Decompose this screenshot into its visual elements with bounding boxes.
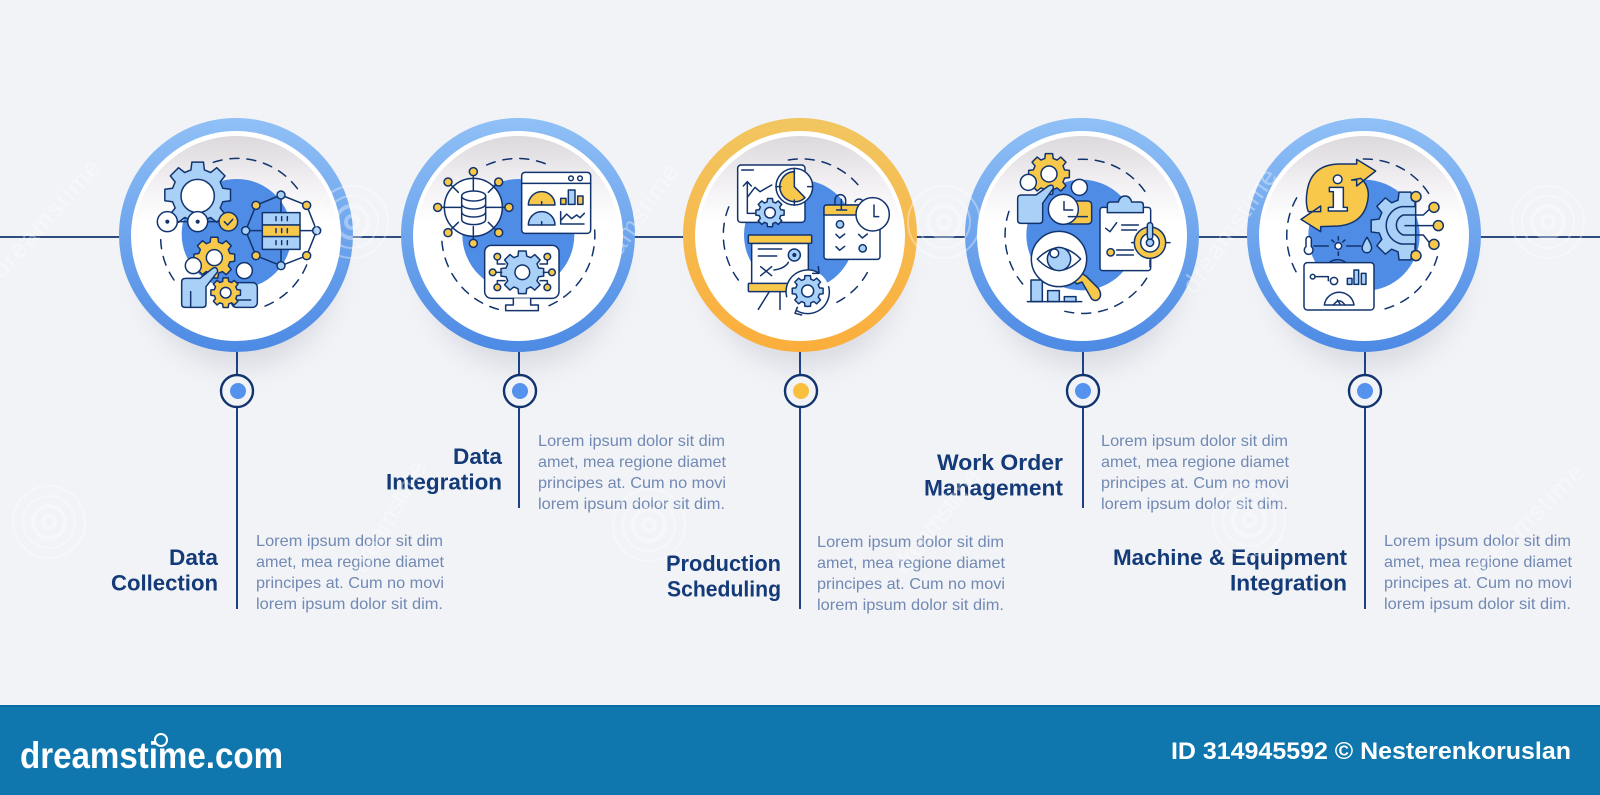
text block 5: principes at. Cum no movi bbox=[1384, 575, 1572, 592]
circle badge 5 bbox=[1247, 118, 1481, 368]
icon: data collection bbox=[157, 158, 321, 307]
text block 1: lorem ipsum dolor sit dim. bbox=[256, 596, 443, 613]
watermark overlay: dreamstime bbox=[577, 157, 685, 293]
circle badge 4 bbox=[965, 118, 1199, 368]
text block 5: Lorem ipsum dolor sit dim bbox=[1384, 533, 1571, 550]
footer banner bbox=[0, 705, 1600, 795]
text block 1: principes at. Cum no movi bbox=[256, 575, 444, 592]
text block 1: amet, mea regione diamet bbox=[256, 554, 445, 571]
heading: data integration: Data bbox=[453, 444, 503, 469]
text block 1: Lorem ipsum dolor sit dim bbox=[256, 533, 443, 550]
text block 3: principes at. Cum no movi bbox=[817, 576, 1005, 593]
panel: work order management bbox=[924, 118, 1290, 513]
icon: production scheduling bbox=[723, 159, 889, 315]
connector stem and node 5 bbox=[1349, 352, 1381, 609]
heading: data collection: Data bbox=[169, 545, 219, 570]
heading: work order management bbox=[924, 450, 1064, 500]
heading: data collection: Collection bbox=[111, 570, 218, 596]
watermark overlay: dreamstime bbox=[1175, 162, 1283, 298]
text block 2: Lorem ipsum dolor sit dim bbox=[538, 433, 725, 450]
text block 2: amet, mea regione diamet bbox=[538, 454, 727, 471]
heading: production scheduling bbox=[666, 551, 781, 602]
text block 1 bbox=[256, 533, 445, 613]
heading: data integration bbox=[386, 444, 503, 494]
icon: machine and equipment integration bbox=[1287, 159, 1443, 310]
watermark overlay: dreamstime bbox=[886, 462, 987, 579]
panel: data integration bbox=[386, 118, 727, 513]
panel: machine and equipment integration bbox=[1113, 118, 1573, 613]
horizontal connector line bbox=[0, 236, 1600, 238]
heading: production scheduling: Production bbox=[666, 551, 781, 576]
heading: machine and equipment integration: Integration bbox=[1230, 570, 1347, 596]
watermark overlay: dreamstime bbox=[1463, 457, 1590, 584]
circle badge 3 bbox=[683, 118, 917, 368]
watermark overlay bbox=[0, 152, 1590, 584]
text block 4: lorem ipsum dolor sit dim. bbox=[1101, 496, 1288, 513]
footer logo: dreamstime.com bbox=[20, 735, 283, 776]
heading: machine and equipment integration bbox=[1113, 545, 1348, 596]
heading: machine and equipment integration: Machine & Equipment bbox=[1113, 545, 1348, 570]
heading: work order management: Management bbox=[924, 476, 1064, 500]
text block 4: amet, mea regione diamet bbox=[1101, 454, 1290, 471]
text block 5: amet, mea regione diamet bbox=[1384, 554, 1573, 571]
text block 3: amet, mea regione diamet bbox=[817, 555, 1006, 572]
text block 4 bbox=[1101, 433, 1290, 513]
connector stem and node 2 bbox=[504, 352, 536, 508]
text block 2 bbox=[538, 433, 727, 513]
panel: production scheduling bbox=[666, 118, 1006, 614]
text block 3 bbox=[817, 534, 1006, 614]
text block 2: lorem ipsum dolor sit dim. bbox=[538, 496, 725, 513]
circle badge 1 bbox=[119, 118, 353, 368]
heading: data integration: Integration bbox=[386, 470, 502, 494]
watermark overlay: dreamstime bbox=[344, 455, 433, 578]
text block 4: principes at. Cum no movi bbox=[1101, 475, 1289, 492]
text block 5: lorem ipsum dolor sit dim. bbox=[1384, 596, 1571, 613]
text block 3: lorem ipsum dolor sit dim. bbox=[817, 597, 1004, 614]
text block 2: principes at. Cum no movi bbox=[538, 475, 726, 492]
connector stem and node 1 bbox=[221, 352, 253, 609]
footer credit: ID 314945592 © Nesterenkoruslan bbox=[1171, 738, 1571, 765]
connector stem and node 4 bbox=[1067, 352, 1099, 508]
icon: work order management bbox=[1005, 154, 1170, 313]
circle badge 2 bbox=[401, 118, 635, 368]
icon: data integration bbox=[434, 158, 595, 311]
heading: data collection bbox=[111, 545, 219, 596]
connector stem and node 3 bbox=[785, 352, 817, 609]
text block 3: Lorem ipsum dolor sit dim bbox=[817, 534, 1004, 551]
text block 4: Lorem ipsum dolor sit dim bbox=[1101, 433, 1288, 450]
text block 5 bbox=[1384, 533, 1573, 613]
heading: work order management: Work Order bbox=[937, 450, 1063, 475]
panel: data collection bbox=[111, 118, 445, 613]
heading: production scheduling: Scheduling bbox=[667, 576, 781, 602]
